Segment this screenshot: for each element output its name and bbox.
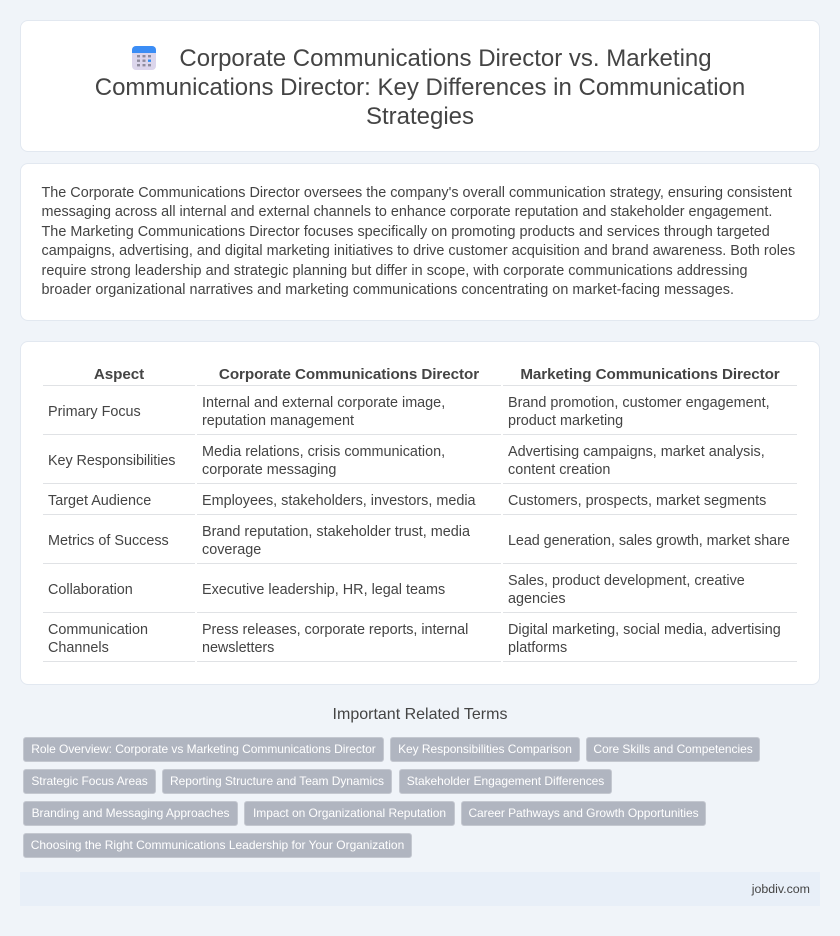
tag: Role Overview: Corporate vs Marketing Communications Director	[31, 742, 376, 756]
row: metrics of success	[48, 524, 790, 558]
row: target audience: Target Audience	[48, 493, 151, 509]
tag: Key Responsibilities Comparison	[398, 742, 572, 756]
row: collaboration	[48, 573, 745, 607]
row: communication channels	[48, 622, 781, 656]
tag	[23, 737, 384, 762]
row: key responsibilities: content creation	[508, 462, 610, 478]
row: metrics of success: Brand reputation, stakeholder trust, media	[202, 524, 470, 540]
row: primary focus: product marketing	[508, 413, 623, 429]
row: primary focus: Brand promotion, customer engagement,	[508, 395, 770, 411]
column headers: Aspect	[94, 366, 144, 383]
tag: Impact on Organizational Reputation	[253, 806, 446, 820]
row: communication channels: Communication	[48, 622, 148, 638]
table	[43, 366, 797, 662]
row: key responsibilities	[48, 444, 765, 478]
tag: Reporting Structure and Team Dynamics	[170, 774, 384, 788]
tag: Strategic Focus Areas	[31, 774, 148, 788]
row: target audience: Employees, stakeholders, investors, media	[202, 493, 476, 509]
tag	[23, 801, 238, 826]
row: collaboration: Sales, product development, creative	[508, 573, 745, 589]
column headers: Corporate Communications Director	[219, 366, 479, 383]
tag: Career Pathways and Growth Opportunities	[468, 806, 699, 820]
intro text	[42, 185, 795, 298]
tag	[390, 737, 580, 762]
intro text: require strong leadership and strategic planning but differ in scope, with corporate communications addressing	[42, 263, 748, 279]
tag	[586, 737, 760, 762]
tag: Core Skills and Competencies	[593, 742, 753, 756]
icon: calendar	[132, 46, 156, 70]
table card	[20, 341, 820, 685]
tag: Branding and Messaging Approaches	[32, 806, 229, 820]
row: collaboration: Collaboration	[48, 582, 133, 598]
footer link text: jobdiv.com	[752, 882, 810, 896]
intro text: The Corporate Communications Director oversees the company's overall communication strategy, ensuring consistent	[42, 185, 792, 201]
row: communication channels: platforms	[508, 640, 567, 656]
related term tags	[23, 737, 760, 858]
intro text: The Marketing Communications Director focuses specifically on promoting products and services through targeted	[42, 224, 770, 240]
title: Communications Director: Key Differences in Communication	[95, 74, 745, 101]
row: primary focus: reputation management	[202, 413, 354, 429]
row: key responsibilities: Advertising campaigns, market analysis,	[508, 444, 765, 460]
tag	[23, 769, 156, 794]
footer	[20, 872, 820, 906]
tag	[162, 769, 392, 794]
row: primary focus: Primary Focus	[48, 404, 141, 420]
row: target audience: Customers, prospects, market segments	[508, 493, 766, 509]
row: primary focus: Internal and external corporate image,	[202, 395, 445, 411]
row: collaboration: agencies	[508, 591, 566, 607]
title	[95, 45, 745, 130]
column headers: Marketing Communications Director	[520, 366, 780, 383]
row: collaboration: Executive leadership, HR, legal teams	[202, 582, 445, 598]
row: communication channels: Channels	[48, 640, 109, 656]
row: key responsibilities: Key Responsibilities	[48, 453, 175, 469]
column headers	[94, 366, 780, 383]
tag: Choosing the Right Communications Leadership for Your Organization	[31, 838, 404, 852]
row: communication channels: newsletters	[202, 640, 274, 656]
row: metrics of success: Metrics of Success	[48, 533, 169, 549]
related terms heading: Important Related Terms	[333, 706, 507, 723]
tag: Stakeholder Engagement Differences	[407, 774, 604, 788]
intro text: messaging across all internal and external channels to enhance corporate reputation and stakeholder engagement.	[42, 204, 772, 220]
tag	[461, 801, 706, 826]
intro card	[20, 163, 820, 321]
row: key responsibilities: corporate messaging	[202, 462, 336, 478]
row: primary focus	[48, 395, 770, 429]
row: target audience	[48, 493, 766, 509]
title: Strategies	[366, 103, 474, 130]
intro text: campaigns, advertising, and digital marketing initiatives to drive customer acquisition and brand awareness. Both roles	[42, 243, 795, 259]
row: metrics of success: coverage	[202, 542, 261, 558]
header card	[20, 20, 820, 152]
row: key responsibilities: Media relations, crisis communication,	[202, 444, 445, 460]
intro text: broader organizational narratives and marketing communications concentrating on market-facing messages.	[42, 282, 734, 298]
row: communication channels: Press releases, corporate reports, internal	[202, 622, 468, 638]
row: communication channels: Digital marketing, social media, advertising	[508, 622, 781, 638]
tag	[23, 833, 412, 858]
tag	[244, 801, 455, 826]
row: metrics of success: Lead generation, sales growth, market share	[508, 533, 790, 549]
title: Corporate Communications Director vs. Marketing	[179, 45, 712, 72]
tag	[399, 769, 612, 794]
